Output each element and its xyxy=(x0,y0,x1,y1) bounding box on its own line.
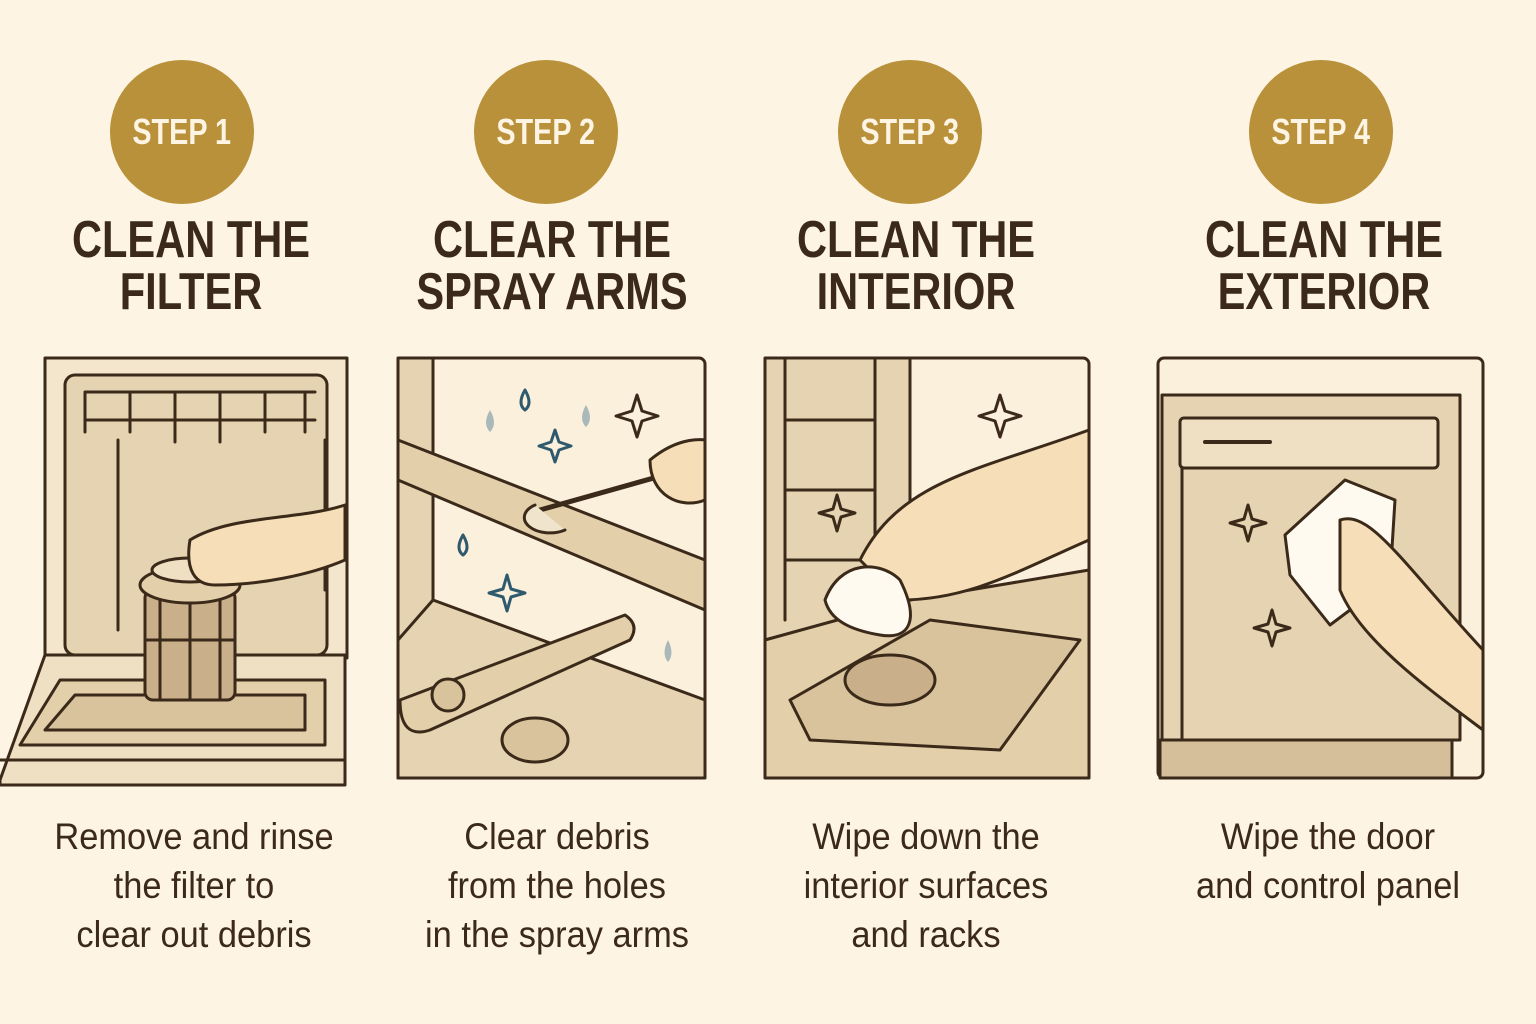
heading 4 xyxy=(1205,211,1443,321)
step 1 badge: STEP 1 xyxy=(133,111,231,152)
panel 3: interior xyxy=(765,358,1089,778)
desc 4: and control panel xyxy=(1196,865,1460,906)
desc 1 xyxy=(54,816,334,955)
desc 4 xyxy=(1196,816,1460,906)
desc 2 xyxy=(425,816,689,955)
step 2 badge: STEP 2 xyxy=(497,111,595,152)
heading 4: CLEAN THE xyxy=(1205,211,1443,269)
heading 1: FILTER xyxy=(120,263,262,321)
desc 1: Remove and rinse xyxy=(54,816,334,857)
heading 3: CLEAN THE xyxy=(797,211,1035,269)
heading 2: SPRAY ARMS xyxy=(416,263,688,321)
desc 1: the filter to xyxy=(114,865,274,906)
desc 4: Wipe the door xyxy=(1221,816,1435,857)
panel 1: filter xyxy=(0,358,347,785)
step 2 badge xyxy=(474,60,618,204)
heading 1 xyxy=(72,211,310,321)
heading 1: CLEAN THE xyxy=(72,211,310,269)
step 4 badge: STEP 4 xyxy=(1272,111,1370,152)
desc 1: clear out debris xyxy=(76,914,312,955)
step 3 badge: STEP 3 xyxy=(861,111,959,152)
desc 3: and racks xyxy=(851,914,1001,955)
heading 2 xyxy=(416,211,688,321)
heading 3 xyxy=(797,211,1035,321)
step 1 badge xyxy=(110,60,254,204)
desc 2: from the holes xyxy=(448,865,666,906)
step 4 badge xyxy=(1249,60,1393,204)
panel 4: exterior xyxy=(1158,358,1483,778)
desc 3: Wipe down the xyxy=(812,816,1040,857)
heading 2: CLEAR THE xyxy=(433,211,671,269)
desc 3 xyxy=(804,816,1048,955)
step 3 badge xyxy=(838,60,982,204)
heading 4: EXTERIOR xyxy=(1218,263,1430,321)
desc 3: interior surfaces xyxy=(804,865,1048,906)
panel 2: spray arms xyxy=(398,358,705,778)
desc 2: Clear debris xyxy=(464,816,650,857)
heading 3: INTERIOR xyxy=(817,263,1015,321)
desc 2: in the spray arms xyxy=(425,914,689,955)
